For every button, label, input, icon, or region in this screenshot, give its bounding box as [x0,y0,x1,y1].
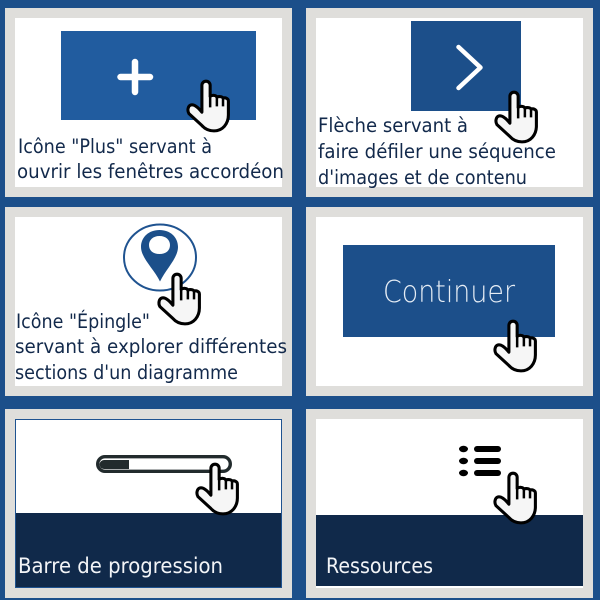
plus caption [17,135,284,183]
blue plus button [61,31,256,120]
plus caption: Icône "Plus" servant à [18,135,212,158]
plus caption: ouvrir les fenêtres accordéon [17,160,284,183]
pin caption [15,310,287,384]
dark caption band [316,515,583,586]
icon: pointing hand [197,464,237,514]
blue continue button: Continuer [383,275,516,310]
pin caption: Icône "Épingle" [16,310,150,333]
icon: pointing hand [495,321,535,371]
pin caption: sections d'un diagramme [15,361,238,384]
blue continue button [343,245,555,337]
icon: pointing hand [159,274,199,324]
icon: pointing hand [495,473,535,523]
panel: plus icon [5,8,292,197]
panel: arrow icon [306,8,593,197]
pin caption: servant à explorer différentes [15,335,287,358]
icon: map pin in circle [124,224,196,290]
icon: pointing hand [188,81,228,131]
arrow caption: d'images et de contenu [318,166,527,189]
progress caption: Barre de progression [18,554,223,578]
icon: list [459,446,501,476]
panel: resources [306,409,593,598]
resources caption: Ressources [326,554,433,578]
arrow caption: faire défiler une séquence [318,140,556,163]
arrow caption [318,114,556,189]
dark caption band [16,513,281,587]
panel: progress bar [5,409,292,598]
panel: continue button [306,207,593,396]
panel: pin icon [5,207,292,396]
blue arrow button [411,21,521,111]
arrow caption: Flèche servant à [318,114,468,137]
icon: progress bar [98,457,230,471]
icon: pointing hand [496,92,536,142]
